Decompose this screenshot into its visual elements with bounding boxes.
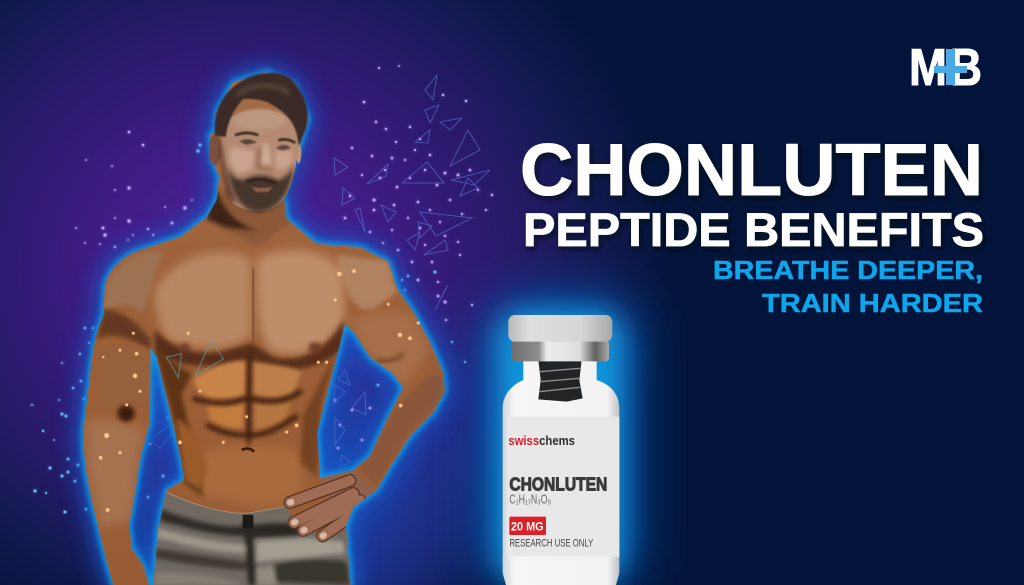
brows [235,133,295,143]
hair highlight [237,86,289,94]
fingers [290,481,362,536]
vial cap [508,315,612,342]
neck [207,193,290,246]
left nipple [180,343,190,352]
left pectoral [155,252,252,348]
label [507,417,619,557]
dosage badge: 20 MG [511,520,544,534]
ab row 1 left [193,361,246,398]
arm right crease [377,354,403,361]
logo [909,39,982,97]
pants button [243,515,253,528]
lower abdomen [200,444,302,509]
purple background glow [0,0,700,585]
forearm right [360,375,442,487]
upper arm left shade [97,309,151,350]
navel [242,449,254,452]
torso and arms silhouette [84,72,445,585]
ab row 1 right [253,362,302,397]
subtitle: PEPTIDE BENEFITS [523,203,984,256]
particles: blue dots [31,143,466,513]
centre chest line [253,268,254,343]
triangles on chest [167,340,223,378]
right nipple [309,342,322,353]
cheek highlights [230,148,293,174]
vial glass body [503,360,619,585]
right ear [296,143,301,163]
muscle shading [86,186,442,585]
elbow shadow [117,405,135,422]
eyes [239,139,291,150]
beard [228,164,294,212]
blue background glow [0,0,700,585]
side shadow right [300,350,337,476]
pants camouflage [153,509,350,585]
pants [153,492,352,585]
man figure [84,72,445,585]
chest shadow [155,320,344,369]
ab shadow lines [193,355,302,451]
face side shadow [219,132,238,205]
man glow outline [84,72,445,585]
tagline line 2: TRAIN HARDER [762,288,983,318]
pants waist edge [165,492,287,513]
logo: M [909,39,947,97]
face [221,109,298,211]
logo: B [950,39,982,97]
vial black neck [538,360,583,402]
upper arm right [350,311,431,386]
moustache line [247,180,277,184]
particles: triangles [150,75,490,470]
particles on body [99,269,420,512]
neck thread highlights [539,368,580,392]
side shadow left [155,350,203,497]
forehead highlight [233,110,287,130]
neck shadow [207,186,257,231]
right pectoral [257,250,345,354]
product vial [503,315,619,585]
forearm left [145,348,151,400]
product name: CHONLUTEN [509,474,607,495]
finger gaps [290,481,362,536]
title: CHONLUTEN [520,130,983,211]
research note: RESEARCH USE ONLY [509,538,594,550]
particles: constellation dots [75,65,493,471]
vial glow [485,300,635,585]
left ear [209,134,221,165]
tagline line 1: BREATHE DEEPER, [713,255,983,285]
ab row 2 left [207,401,244,428]
abdominals [193,355,302,509]
mouth [252,186,273,192]
hair [215,73,308,146]
formula: C₁H₁₇N₃O₉ [509,492,551,506]
brand: swisschems [508,434,575,448]
nose shadow [258,149,272,169]
lower forearm left [86,419,143,528]
ab row 2 right [254,401,292,429]
fingernails [290,502,324,536]
head [209,73,308,212]
nose highlight [261,144,271,165]
left shoulder [103,251,163,313]
right shoulder [337,255,397,310]
oblique left [177,418,207,490]
back of hand [320,470,377,511]
metal ring [512,341,609,361]
hand [290,470,377,536]
